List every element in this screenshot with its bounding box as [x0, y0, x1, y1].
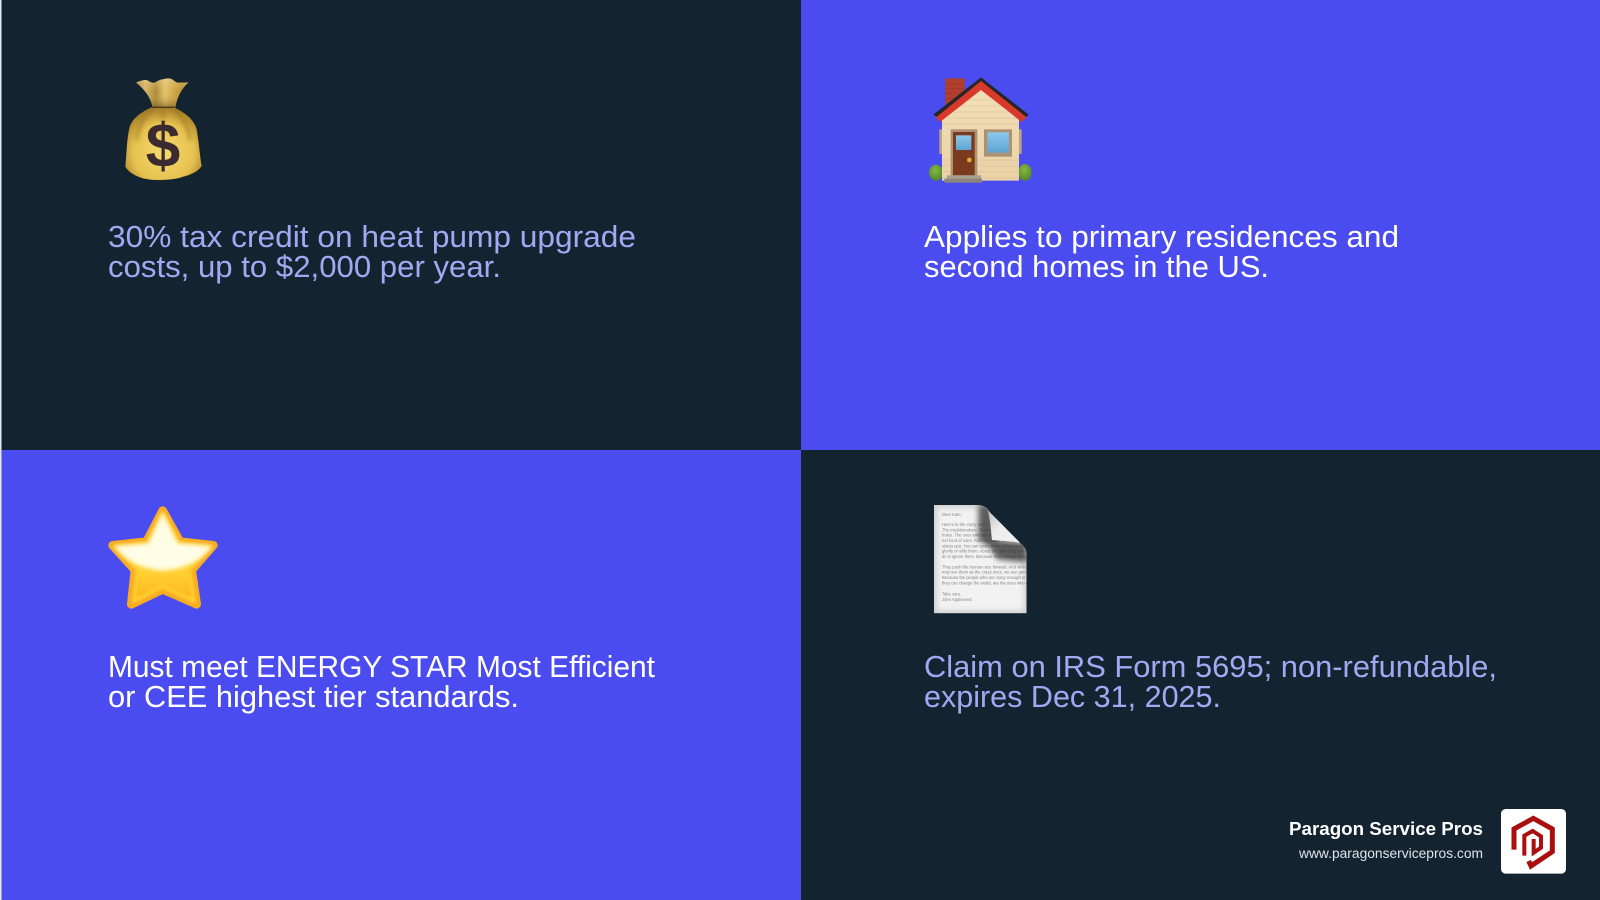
logo	[1501, 809, 1566, 874]
icon: document: They push the human race forward. And while some	[942, 565, 1039, 570]
text: efficiency standards: or CEE highest tier standards.	[108, 679, 519, 714]
icon: money bag	[125, 78, 202, 181]
text: eligibility: Applies to primary residences and	[924, 219, 1399, 254]
text: tax credit: 30% tax credit on heat pump upgrade	[108, 219, 636, 254]
icon: document: Because the people who are crazy enough to think	[942, 575, 1036, 580]
panel: how to claim	[925, 505, 1566, 874]
icon: document: not fond of rules. And they have no respect	[942, 538, 1022, 543]
text: eligibility: second homes in the US.	[924, 249, 1269, 284]
icon: document: may see them as the crazy ones, we see genius.	[942, 570, 1032, 575]
text: how to claim: Claim on IRS Form 5695; non-refundable,	[924, 649, 1497, 684]
icon: document: holes. The ones who see things differently.	[942, 533, 1020, 538]
icon: document: Dear Kate,	[942, 512, 962, 517]
icon: document	[934, 505, 1027, 614]
text: tax credit: costs, up to $2,000 per year.	[108, 249, 501, 284]
icon: house	[929, 77, 1032, 183]
icon: document: do is ignore them. Because they change things.	[942, 554, 1030, 559]
icon: star	[113, 511, 213, 604]
icon: document: John Appleseed	[942, 597, 972, 602]
panel: efficiency standards	[0, 450, 801, 900]
panel: eligibility	[801, 0, 1600, 450]
text: how to claim: expires Dec 31, 2025.	[924, 679, 1221, 714]
icon: document: Here's to the crazy ones. The misfits.	[942, 522, 1010, 527]
icon: document: status quo. You can quote them, disagree with them,	[942, 543, 1039, 548]
icon: document: they can change the world, are the ones who do.	[942, 580, 1032, 585]
icon: money bag: $	[146, 112, 180, 181]
panel: tax credit	[0, 0, 635, 450]
icon: document: The troublemakers. The round pegs in the	[942, 527, 1020, 532]
icon: document: Take care,	[942, 592, 961, 597]
icon: document: glorify or vilify them. About the only thing you can't	[942, 549, 1035, 554]
brand url: www.paragonservicepros.com	[1298, 846, 1483, 861]
brand name: Paragon Service Pros	[1289, 819, 1483, 839]
text: efficiency standards: Must meet ENERGY STAR Most Efficient	[108, 649, 655, 684]
